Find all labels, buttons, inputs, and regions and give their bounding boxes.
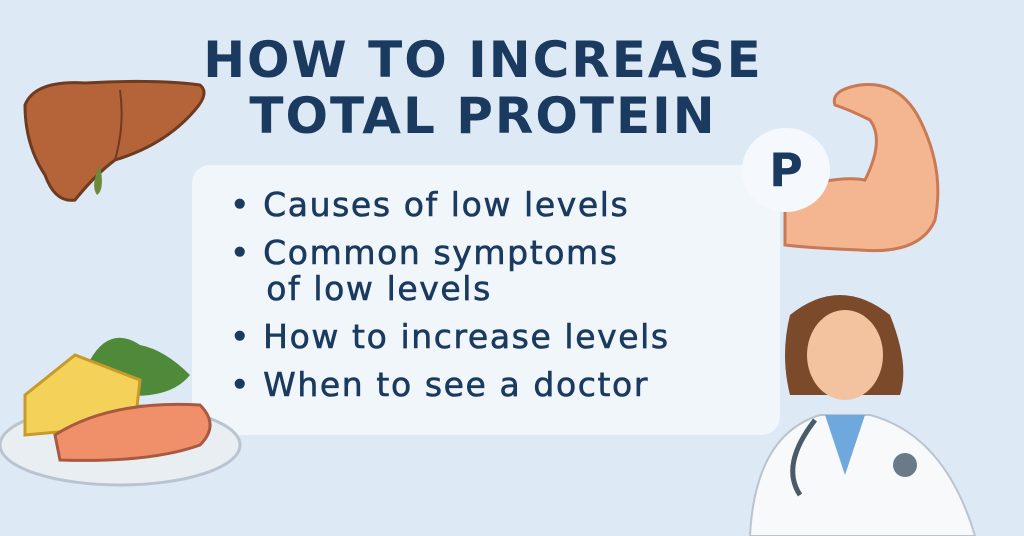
title: TOTAL PROTEIN (249, 87, 717, 145)
bullet list (230, 185, 670, 404)
icon: liver (24, 80, 206, 202)
icon: doctor (749, 295, 976, 536)
icon: food plate (0, 338, 242, 486)
panel: topics list (192, 165, 780, 435)
title: HOW TO INCREASE (203, 31, 763, 89)
title (203, 31, 763, 145)
icon: P badge (742, 128, 830, 212)
icon: P badge: P (769, 143, 803, 197)
bullet list: • When to see a doctor (230, 365, 649, 404)
bullet list: of low levels (266, 269, 492, 308)
bullet list: • How to increase levels (230, 317, 670, 356)
bullet list: • Common symptoms (230, 233, 619, 272)
bullet list: • Causes of low levels (230, 185, 629, 224)
icon: flexed arm (784, 83, 940, 252)
